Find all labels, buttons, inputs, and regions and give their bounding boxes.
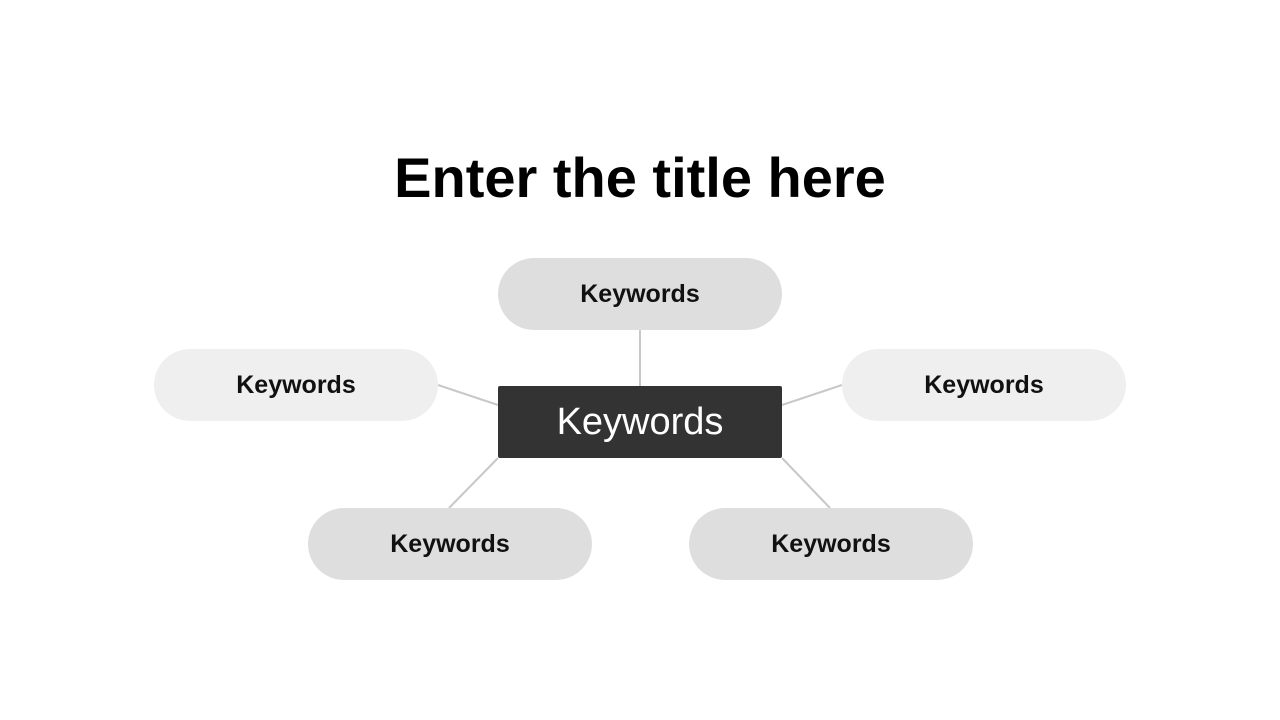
pill: left keyword [154,349,438,421]
pill: top keyword [498,258,782,330]
pill: right keyword [842,349,1126,421]
pill: left keyword: Keywords [236,370,356,398]
pill: bottom-left keyword [308,508,592,580]
pill: bottom-left keyword: Keywords [390,530,510,558]
center keyword box: Keywords [557,400,723,442]
pill: bottom-right keyword: Keywords [771,530,891,558]
title: Enter the title here [394,146,886,209]
pill: top keyword: Keywords [580,280,700,308]
pill: right keyword: Keywords [924,370,1044,398]
pill: bottom-right keyword [689,508,973,580]
center keyword box [498,386,782,458]
